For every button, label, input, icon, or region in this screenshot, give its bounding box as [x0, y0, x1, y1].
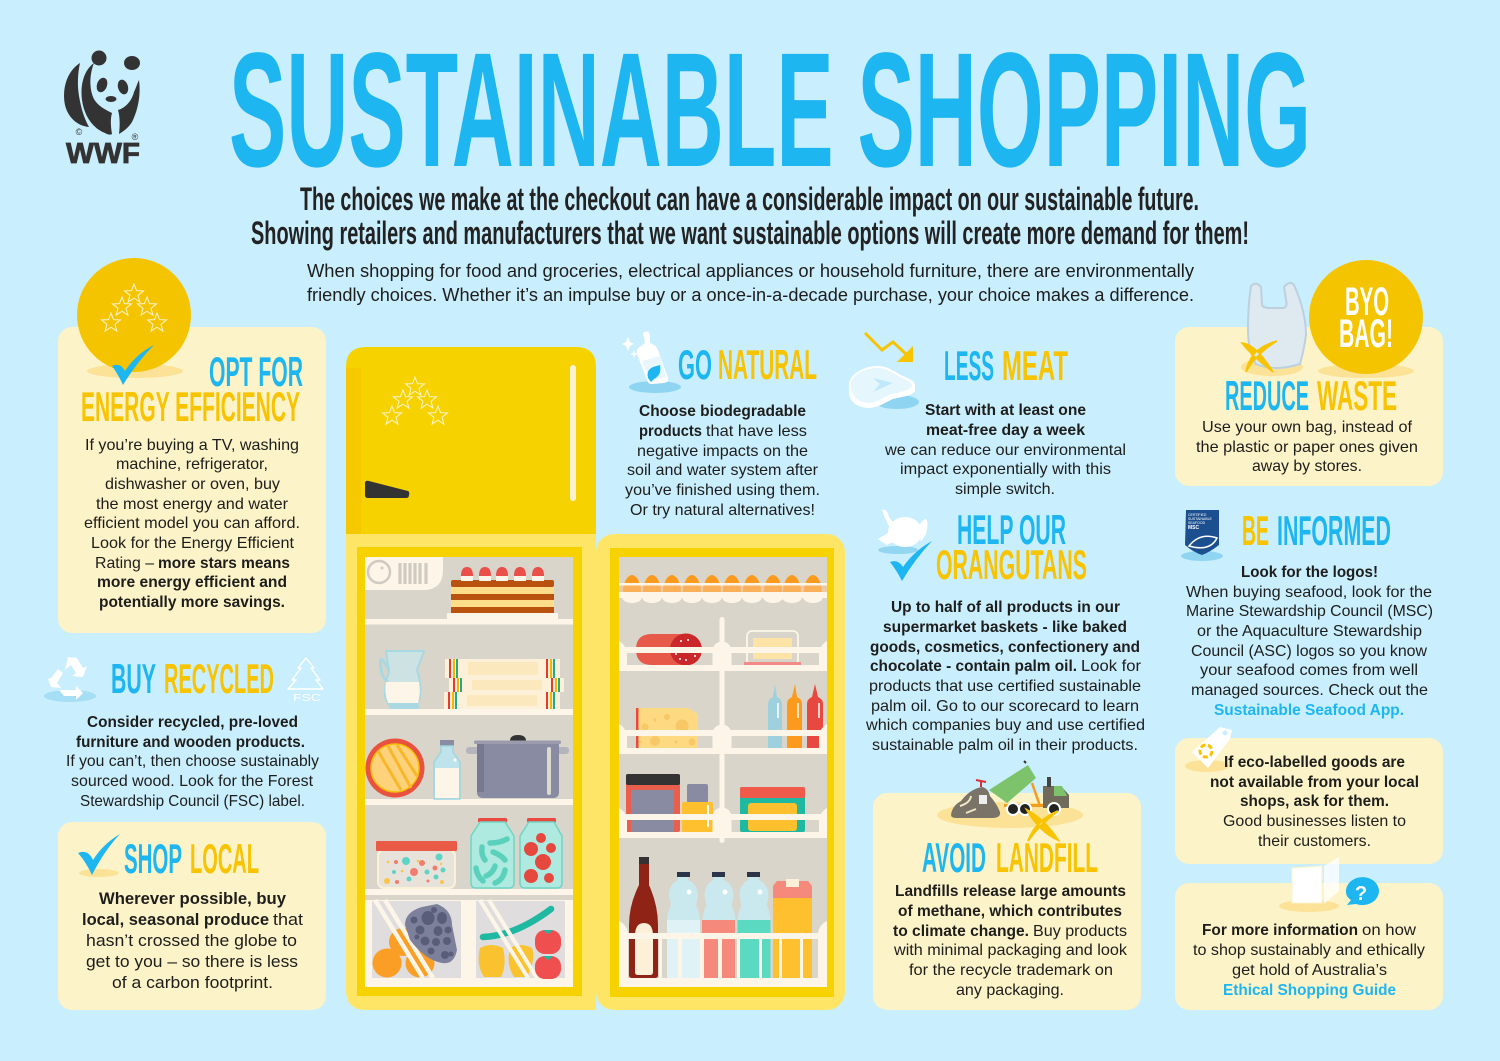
fridge top door [346, 347, 596, 534]
body text: managed sources. Check out the [1191, 682, 1428, 699]
body text: If you’re buying a TV, washing [85, 437, 299, 454]
body text: that have less [706, 423, 807, 440]
body text: impact exponentially with this [900, 461, 1111, 478]
body text [625, 403, 820, 519]
heading: OPT FOR [209, 348, 303, 395]
icon: BYO bag badge: BYO [1345, 280, 1389, 324]
bottom rack [619, 921, 827, 987]
icon: recycle symbol [44, 657, 96, 702]
body text: of methane, which contributes [898, 903, 1122, 920]
jar of pickles [471, 818, 514, 888]
section: less meat [849, 333, 1126, 498]
subtitle [251, 181, 1249, 251]
heading: LESS [944, 342, 994, 389]
right door [596, 534, 845, 1010]
body text [865, 599, 1145, 754]
panel: opt for energy efficiency [58, 258, 326, 633]
body text: with minimal packaging and look [893, 942, 1128, 959]
body text: away by stores. [1252, 458, 1362, 475]
section: go natural [622, 332, 820, 519]
lower door rack [619, 808, 827, 838]
body text: on how [1362, 922, 1416, 939]
icon: plastic bag with cross [1241, 283, 1306, 376]
wine bottle [629, 857, 658, 978]
body text: which companies buy and use certified [865, 717, 1145, 734]
body text: the plastic or paper ones given [1196, 439, 1418, 456]
sauce bottles [768, 684, 823, 748]
WWF panda logo: © [76, 127, 83, 137]
fridge shelves [365, 619, 573, 895]
panel: more information [1175, 857, 1443, 1010]
heading: BE [1242, 507, 1269, 554]
body text: machine, refrigerator, [116, 456, 268, 473]
green box [740, 787, 805, 832]
section: be informed [1181, 507, 1433, 719]
icon: MSC label: CERTIFIED [1188, 513, 1207, 517]
body text: Or try natural alternatives! [630, 502, 815, 519]
heading: ORANGUTANS [936, 541, 1087, 588]
icon: MSC label [1181, 510, 1223, 561]
body text: Stewardship Council (FSC) label. [80, 793, 305, 810]
panel: reduce waste [1175, 260, 1443, 486]
body text: products that use certified sustainable [869, 678, 1141, 695]
body text: sourced wood. Look for the Forest [71, 773, 314, 790]
body text: If eco-labelled goods are [1224, 754, 1405, 771]
body text: Rating – [95, 555, 154, 572]
body text: any packaging. [956, 982, 1064, 999]
body text: Marine Stewardship Council (MSC) [1186, 603, 1433, 620]
body text: local, seasonal produce [82, 910, 269, 929]
salami [636, 634, 702, 666]
icon: MSC label: MSC [1188, 525, 1200, 531]
tin and bottle [626, 774, 713, 832]
heading: ENERGY EFFICIENCY [81, 383, 300, 430]
body text [884, 402, 1126, 498]
icon: detergent bottle [622, 332, 681, 393]
heading: AVOID [922, 834, 986, 881]
body text: sustainable palm oil in their products. [872, 737, 1138, 754]
body text: of a carbon footprint. [112, 973, 273, 992]
body text: products [639, 423, 702, 440]
section: buy recycled [44, 655, 323, 810]
heading: BUY [111, 655, 156, 702]
arrowhead [897, 346, 913, 362]
body text: efficient model you can afford. [84, 515, 300, 532]
icon: landfill truck [937, 761, 1083, 841]
WWF panda logo: WWF [66, 138, 140, 170]
body text [1193, 922, 1425, 999]
panel: eco-labelled goods [1175, 727, 1443, 864]
food container [376, 841, 457, 888]
control panel [365, 557, 443, 590]
butter dish [744, 631, 801, 665]
icon: guide book with question bubble [1279, 857, 1379, 912]
cheese [636, 708, 698, 748]
plate [366, 738, 424, 798]
jug of milk [380, 651, 424, 709]
body text [1210, 754, 1419, 850]
body text: Look for [1081, 658, 1142, 675]
icon: FSC tree label: FSC [293, 693, 321, 704]
body text [82, 889, 303, 992]
body text: that [273, 910, 303, 929]
fridge body left [346, 534, 596, 1010]
heading: MEAT [1002, 342, 1068, 389]
body text [84, 437, 300, 611]
icon: steak [849, 366, 919, 409]
intro text: When shopping for food and groceries, electrical appliances or household furniture, there are environmentally [307, 261, 1194, 281]
body text: we can reduce our environmental [884, 442, 1126, 459]
vegetables [479, 900, 561, 979]
body text: get hold of Australia’s [1232, 962, 1387, 979]
body text [893, 883, 1128, 999]
body text: for the recycle trademark on [909, 962, 1113, 979]
body text: Good businesses listen to [1223, 813, 1406, 830]
body text: get to you – so there is less [86, 952, 298, 971]
body text: palm oil. Go to our scorecard to learn [871, 698, 1139, 715]
crisper drawers [365, 900, 573, 987]
water bottles [667, 872, 770, 978]
body text: dishwasher or oven, buy [105, 476, 280, 493]
intro text [307, 261, 1194, 305]
oranges and grapes [372, 900, 457, 978]
intro text: friendly choices. Whether it’s an impulse buy or a once-in-a-decade purchase, your choice makes a difference. [307, 285, 1194, 305]
body text: soil and water system after [627, 462, 819, 479]
heading [936, 506, 1087, 588]
body text: Start with at least one [925, 402, 1086, 419]
body text: For more information [1202, 922, 1358, 939]
juice carton [773, 879, 812, 978]
body text: If you can’t, then choose sustainably [66, 753, 319, 770]
icon: tick [78, 834, 120, 877]
panel: avoid landfill: LANDFILL [996, 834, 1098, 881]
cooking pot [466, 735, 569, 798]
cake [447, 567, 558, 619]
body text: Consider recycled, pre-loved [87, 714, 298, 731]
body text: Council (ASC) logos so you know [1191, 643, 1427, 660]
body text: furniture and wooden products. [76, 734, 305, 751]
section: help our orangutans [865, 506, 1145, 754]
heading: HELP OUR [957, 506, 1066, 553]
heading: INFORMED [1277, 507, 1391, 554]
body text: to shop sustainably and ethically [1193, 942, 1425, 959]
body text: their customers. [1258, 833, 1371, 850]
body text: Choose biodegradable [639, 403, 806, 420]
body text: or the Aquaculture Stewardship [1197, 623, 1422, 640]
body text: more energy efficient and [97, 574, 287, 591]
body text: simple switch. [955, 481, 1055, 498]
icon: orangutan with tick [878, 510, 932, 581]
jar of tomatoes [520, 818, 562, 888]
panel: avoid landfill [873, 761, 1141, 1010]
heading: GO [678, 341, 712, 388]
panel: shop local: LOCAL [190, 835, 259, 882]
body text: shops, ask for them. [1240, 793, 1389, 810]
body text: the most energy and water [96, 496, 289, 513]
body text [1196, 419, 1418, 475]
icon: down arrow [865, 333, 906, 354]
body text: Look for the Energy Efficient [91, 535, 295, 552]
body text [66, 714, 319, 810]
body text: Ethical Shopping Guide [1223, 982, 1396, 999]
section: go natural: NATURAL [718, 341, 817, 388]
icon: FSC tree label [288, 658, 323, 704]
body text: When buying seafood, look for the [1186, 584, 1432, 601]
icon: star circle with tick [77, 258, 191, 385]
body text: supermarket baskets - like baked [883, 619, 1127, 636]
body text: Buy products [1033, 923, 1127, 940]
body text: negative impacts on the [637, 443, 808, 460]
milk bottle [434, 740, 460, 799]
body text: Look for the logos! [1241, 564, 1378, 581]
body text: your seafood comes from well [1200, 662, 1418, 679]
body text: Wherever possible, buy [99, 889, 287, 908]
body text: more stars means [158, 555, 290, 572]
body text: you’ve finished using them. [625, 482, 820, 499]
heading [81, 348, 303, 430]
heading [678, 341, 817, 388]
door rack shelves [619, 641, 827, 754]
body text: potentially more savings. [99, 594, 285, 611]
heading [111, 655, 274, 702]
stack of towels [444, 659, 564, 709]
icon: guide book with question bubble: ? [1355, 883, 1367, 905]
fridge illustration [346, 347, 845, 1010]
body text: Up to half of all products in our [891, 599, 1120, 616]
icon: BYO bag badge [1309, 260, 1423, 378]
WWF panda logo: ® [132, 132, 139, 142]
body text: chocolate - contain palm oil. [870, 658, 1077, 675]
icon: BYO bag badge: BAG! [1339, 312, 1393, 356]
body text: meat-free day a week [926, 422, 1085, 439]
icon: MSC label: SUSTAINABLE [1188, 517, 1213, 521]
icon: MSC label: SEAFOOD [1188, 521, 1206, 525]
body text: Landfills release large amounts [895, 883, 1126, 900]
body text: to climate change. [893, 923, 1029, 940]
section: buy recycled: RECYCLED [164, 655, 274, 702]
heading: WASTE [1317, 372, 1397, 419]
panel: shop local [58, 822, 326, 1010]
eggs [619, 575, 827, 603]
body text: Sustainable Seafood App. [1214, 702, 1404, 719]
body text: hasn’t crossed the globe to [86, 931, 297, 950]
heading [1242, 507, 1391, 554]
body text: goods, cosmetics, confectionery and [870, 639, 1140, 656]
WWF panda logo [64, 50, 140, 170]
heading: SHOP [124, 835, 182, 882]
heading: REDUCE [1225, 372, 1309, 419]
body text: not available from your local [1210, 774, 1419, 791]
body text [1186, 564, 1433, 719]
icon: eco tag [1185, 727, 1232, 772]
body text: Use your own bag, instead of [1202, 419, 1413, 436]
